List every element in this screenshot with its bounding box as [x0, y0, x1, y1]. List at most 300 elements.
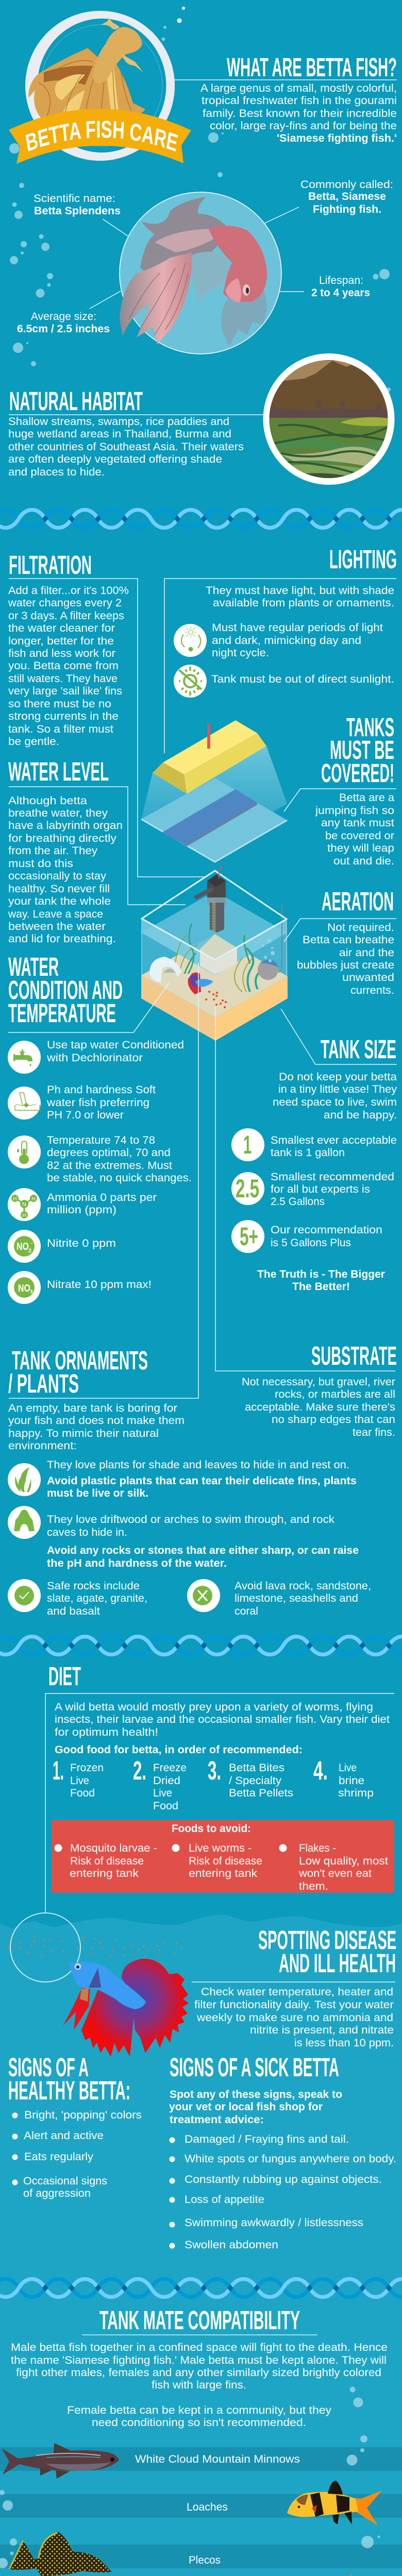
signs of a healthy betta	[8, 2053, 142, 2199]
sunlight text: Tank must be out of direct sunlight.	[211, 673, 394, 685]
flakes: Flakes -	[299, 1842, 336, 1854]
water level text: way. Leave a space	[8, 908, 103, 920]
arches text	[47, 1514, 359, 1569]
fish: corydoras	[305, 2573, 395, 2576]
size 2.5: 2.5	[236, 1174, 259, 1203]
food 2	[133, 1756, 187, 1812]
wave divider 1	[0, 510, 402, 528]
size 5 plus: is 5 Gallons Plus	[271, 1237, 351, 1249]
food 2: Food	[153, 1800, 178, 1812]
exploded aquarium illustration	[141, 720, 288, 1041]
water level text: have a labyrinth organ	[8, 820, 123, 832]
habitat text: Shallow streams, swamps, rice paddies and	[8, 416, 229, 428]
light lamp	[153, 720, 266, 794]
tank size text: Do not keep your betta	[279, 1071, 397, 1083]
diet intro: A wild betta would mostly prey upon a variety of worms, flying	[55, 1701, 373, 1713]
mosquito larvae: entering tank	[70, 1868, 139, 1879]
safe rocks: Safe rocks include	[47, 1580, 140, 1592]
aeration text: bubbles just create	[297, 959, 394, 971]
tanks must be covered	[284, 713, 396, 867]
healthy list: of aggression	[23, 2188, 91, 2199]
description: tropical freshwater fish in the gourami	[202, 95, 397, 107]
average size	[17, 291, 121, 335]
icon: nitrite: -	[31, 1240, 33, 1246]
sick list: Swimming awkwardly / listlessness	[185, 2217, 363, 2229]
food 4	[313, 1756, 374, 1799]
ventral fin	[63, 1987, 90, 2030]
cover text: jumping fish so	[315, 805, 394, 817]
item: temperature: degrees optimal, 70 and	[47, 1147, 171, 1159]
item: tap water	[8, 1039, 184, 1074]
bubbles: lower section	[0, 2386, 382, 2576]
glass lid	[141, 778, 287, 862]
plants in tank	[175, 923, 260, 992]
icon: ammonia molecule: H	[22, 1213, 26, 1218]
substrate text: tear fins.	[353, 1427, 395, 1438]
wave divider 3	[0, 2279, 402, 2297]
habitat text: are often deeply vegetated offering shade	[8, 453, 222, 465]
advice: treatment advice:	[170, 2114, 264, 2126]
size 2.5: Smallest recommended	[271, 1171, 394, 1183]
disease text: filter functionality daily. Test your water	[194, 1999, 394, 2011]
label: loaches: Loaches	[187, 2501, 228, 2513]
flakes	[279, 1842, 388, 1892]
rocks to avoid	[187, 1579, 371, 1617]
plants text	[47, 1459, 357, 1499]
ring	[25, 11, 175, 161]
item: nitrate	[8, 1271, 152, 1304]
food 2: Freeze	[153, 1762, 187, 1774]
size 2.5: 2.5 Gallons	[271, 1196, 325, 1208]
compatibility text	[11, 2342, 388, 2429]
advice: your vet or local fish shop for	[169, 2101, 323, 2113]
icon: nitrate: 3	[30, 1289, 33, 1295]
heading: HEALTHY BETTA:	[8, 2076, 130, 2105]
foods to avoid panel: Foods to avoid:	[172, 1823, 251, 1835]
filter	[195, 868, 226, 933]
food 1	[53, 1756, 104, 1799]
cover text: out and die.	[333, 855, 394, 867]
healthy list: Alert and active	[24, 2130, 104, 2142]
food 2: Dried	[153, 1775, 180, 1787]
water level text: for breathing directly	[8, 833, 117, 844]
item: ammonia	[8, 1188, 157, 1221]
arches text: caves to hide in.	[47, 1527, 127, 1538]
food 4: brine	[339, 1775, 364, 1787]
filtration text: strong currents in the	[8, 710, 119, 722]
disease text: weekly to make sure no ammonia and	[196, 2012, 393, 2024]
water level text: Although betta	[8, 795, 87, 807]
heading	[258, 1925, 396, 1978]
ornaments intro: your fish and does not make them	[8, 1415, 185, 1427]
tank size text	[273, 1071, 397, 1121]
tank mate compatibility	[11, 2306, 388, 2429]
substrate text: rocks, or marbles are all	[275, 1388, 395, 1400]
water surface	[141, 891, 287, 975]
disease text: is less than 10 ppm.	[294, 2037, 394, 2049]
habitat text: other countries of Southeast Asia. Their waters	[8, 441, 244, 453]
item: nitrate: Nitrate 10 ppm max!	[47, 1279, 152, 1291]
food 4: 4.	[313, 1756, 328, 1785]
water level text	[8, 795, 123, 945]
cover text: any tank must	[321, 817, 394, 829]
icon: ammonia molecule: H	[31, 1196, 36, 1202]
filtration text: longer, better for the	[8, 635, 114, 647]
label: plecos: Plecos	[189, 2554, 221, 2566]
rock and bubbles	[258, 904, 282, 980]
description: color, large ray-fins and for being the	[210, 120, 397, 132]
water level text: breathe water, they	[8, 807, 108, 819]
heading	[8, 952, 123, 1028]
icon: nitrate: NO	[18, 1283, 30, 1294]
heading: TANK ORNAMENTS	[12, 1346, 148, 1375]
icon: nitrite: NO	[16, 1241, 29, 1252]
substrate text: Not necessary, but gravel, river	[242, 1376, 395, 1388]
hero emblem: ring, gold betta and banner	[9, 11, 191, 164]
lighting intro: available from plants or ornaments.	[213, 597, 394, 609]
average size: 6.5cm / 2.5 inches	[17, 323, 110, 335]
lighter water area with wavy surface	[0, 1914, 402, 2576]
item: temperature: 82 at the extremes. Must	[47, 1160, 172, 1172]
tank mate rows	[0, 2447, 402, 2576]
magnifier ring	[10, 1913, 80, 1982]
mosquito larvae	[55, 1842, 157, 1879]
food 3: 3.	[208, 1756, 221, 1785]
icon: thermometer	[8, 1136, 41, 1168]
water level text: must do this	[8, 858, 73, 870]
live worms: Live worms -	[189, 1842, 252, 1854]
food 2: 2.	[133, 1756, 146, 1785]
anal fin	[81, 1990, 135, 2057]
wave divider 2	[0, 1637, 402, 1654]
item: temperature: be stable, no quick changes.	[47, 1172, 192, 1184]
heading	[8, 2053, 130, 2105]
tail fin	[122, 1959, 189, 2053]
foods to avoid panel	[52, 1820, 394, 1893]
tank base	[141, 975, 215, 1041]
feeding blue betta illustration	[9, 1913, 189, 2057]
item: ph: PH 7.0 or lower	[47, 1109, 124, 1121]
bubbles: upper section	[9, 7, 391, 392]
advice: Spot any of these signs, speak to	[170, 2089, 342, 2100]
heading: SIGNS OF A	[8, 2053, 89, 2082]
icon: ammonia molecule	[8, 1188, 41, 1221]
sick list	[169, 2133, 396, 2251]
filtration text: still waters. They have	[8, 673, 118, 685]
arch ornament	[149, 957, 181, 982]
heading: / PLANTS	[8, 1369, 79, 1398]
ornaments intro: happy. To mimic their natural	[8, 1428, 159, 1439]
commonly called: Betta, Siamese	[308, 191, 386, 202]
substrate text: acceptable. Make sure there's	[245, 1401, 395, 1413]
bubble circle	[120, 192, 281, 354]
the truth: The Better!	[292, 1281, 350, 1293]
the truth: The Truth is - The Bigger	[257, 1268, 385, 1280]
tank size text: and be happy.	[324, 1109, 397, 1121]
food 3: Betta Pellets	[229, 1787, 293, 1799]
food 4: shrimp	[338, 1787, 374, 1799]
aeration text	[297, 922, 394, 996]
water level text: your tank the whole	[8, 895, 111, 907]
aeration text: Not required.	[327, 922, 394, 934]
habitat text: huge wetland areas in Thailand, Burma and	[8, 428, 231, 440]
signs of a sick betta	[169, 2053, 396, 2251]
cycle text: and dark, mimicking day and	[212, 635, 361, 647]
compatibility text: fight other males, females and any other similarly sized brightly colored	[16, 2367, 381, 2379]
water level text: healthy. So never fill	[8, 883, 110, 895]
compatibility text: fish with large fins.	[152, 2379, 246, 2391]
food 1: Live	[70, 1775, 89, 1787]
healthy list	[12, 2109, 142, 2199]
aeration text: unwanted	[342, 972, 394, 984]
compatibility text: Male betta fish together in a confined space will fight to the death. Hence	[11, 2342, 388, 2353]
compatibility text: the name 'Siamese fighting fish.' Male betta must be kept alone. They will	[11, 2354, 387, 2366]
water level	[8, 757, 186, 945]
safe rocks: and basalt	[47, 1605, 100, 1617]
tank size	[231, 1009, 397, 1293]
disease text	[194, 1986, 394, 2049]
habitat landscape	[263, 353, 395, 485]
cycle text: Must have regular periods of light	[212, 622, 383, 634]
cycle text: night cycle.	[212, 647, 269, 659]
description: A large genus of small, mostly colorful,	[200, 82, 397, 94]
sick list: Swollen abdomen	[185, 2239, 278, 2251]
gold betta	[28, 17, 145, 121]
flakes: them.	[299, 1880, 328, 1892]
aeration text: currents.	[350, 985, 394, 996]
safe rocks: slate, agate, granite,	[47, 1592, 147, 1604]
item: tap water: with Dechlorinator	[46, 1052, 143, 1064]
food 4: Live	[339, 1762, 357, 1774]
filtration text: you. Betta come from	[8, 660, 119, 672]
size 2.5	[231, 1171, 394, 1208]
heading: FILTRATION	[9, 550, 92, 580]
arches text: Avoid any rocks or stones that are either sharp, or can raise	[47, 1545, 359, 1556]
rear block	[200, 934, 237, 961]
filtration text: Add a filter...or it's 100%	[8, 585, 129, 597]
tank size text: in a tiny little vase! They	[278, 1083, 397, 1095]
lifespan	[280, 275, 370, 299]
light beam	[141, 746, 287, 845]
aeration text: air and the	[339, 947, 394, 959]
heading: DIET	[48, 1662, 81, 1691]
average size: Average size:	[31, 311, 96, 323]
compatibility text: need conditioning so isn't recommended.	[92, 2417, 306, 2429]
food specks	[9, 1936, 181, 1957]
water level text: between the water	[8, 921, 106, 933]
disease text: nitrite is present, and nitrate	[250, 2024, 394, 2036]
cover text: be covered or	[325, 830, 394, 842]
heading	[8, 1346, 148, 1398]
diet intro: Good food for betta, in order of recommended:	[55, 1744, 303, 1756]
item: nitrite: Nitrite 0 ppm	[47, 1238, 116, 1249]
what are betta fish	[166, 53, 397, 144]
aeration	[284, 887, 396, 996]
description: 'Siamese fighting fish.'	[277, 132, 397, 144]
icon: arch	[8, 1506, 41, 1539]
ornaments intro	[8, 1402, 185, 1452]
mosquito larvae: Mosquito larvae -	[70, 1842, 157, 1854]
size 1: tank is 1 gallon	[271, 1147, 345, 1159]
food 3	[208, 1756, 293, 1799]
the truth	[257, 1268, 385, 1293]
diet	[45, 1662, 394, 1913]
icon: test strip	[8, 1087, 41, 1120]
icon: ammonia molecule: H	[13, 1196, 17, 1202]
ornaments intro: An empty, bare tank is boring for	[8, 1402, 177, 1414]
water condition and temperature	[8, 952, 192, 1304]
sick list: Damaged / Fraying fins and tail.	[185, 2133, 349, 2145]
food 3: / Specialty	[229, 1775, 282, 1787]
diet intro: insects, their larvae and the occasional smaller fish. Vary their diet	[55, 1714, 390, 1725]
natural habitat	[8, 353, 395, 485]
tank rim	[142, 871, 287, 960]
icon: nitrate	[8, 1271, 41, 1304]
tank size text: need space to live, swim	[273, 1096, 397, 1108]
pectoral fin	[89, 1968, 101, 1988]
lifespan: 2 to 4 years	[311, 287, 370, 299]
habitat text: and places to hide.	[8, 466, 105, 478]
plants text: must be live or silk.	[47, 1487, 148, 1499]
item: temperature: Temperature 74 to 78	[47, 1134, 155, 1146]
filtration text: tank. So a filter must	[8, 723, 113, 735]
live worms: Risk of disease	[189, 1855, 262, 1867]
size 1: 1	[243, 1130, 252, 1159]
betta in tank	[188, 973, 213, 994]
size 5 plus	[231, 1220, 382, 1253]
eye	[74, 1963, 81, 1970]
sick list: Loss of appetite	[185, 2194, 264, 2206]
lighting intro: They must have light, but with shade	[206, 585, 394, 597]
spotting disease	[192, 1925, 396, 2049]
commonly called: Commonly called:	[300, 179, 393, 191]
heading: NATURAL HABITAT	[9, 386, 143, 416]
item: ammonia: Ammonia 0 parts per	[47, 1192, 157, 1204]
substrate text: no sharp edges that can	[272, 1414, 395, 1426]
live worms	[172, 1842, 262, 1879]
pink betta illustration	[120, 197, 267, 347]
substrate text	[242, 1376, 395, 1438]
description: family. Best known for their incredible	[203, 108, 397, 120]
scientific name: Scientific name:	[34, 193, 115, 205]
arches text: the pH and hardness of the water.	[47, 1557, 227, 1569]
food 1: Food	[70, 1787, 95, 1799]
size 1: Smallest ever acceptable	[271, 1134, 397, 1146]
item: ph: Ph and hardness Soft	[47, 1084, 156, 1096]
lighting intro	[206, 585, 394, 609]
cover text: Betta are a	[339, 792, 394, 804]
cover text	[315, 792, 394, 867]
mosquito larvae: Risk of disease	[70, 1855, 144, 1867]
description	[200, 82, 397, 144]
heading	[321, 713, 394, 788]
scientific name	[34, 193, 128, 236]
filtration text	[8, 585, 129, 748]
banner	[9, 109, 191, 164]
diet intro	[55, 1701, 390, 1756]
icon: ammonia molecule: N	[22, 1201, 26, 1208]
water level text: and lid for breathing.	[8, 933, 116, 945]
cycle text	[212, 622, 383, 659]
size 5 plus: 5+	[240, 1222, 258, 1251]
water level text: from the air. They	[8, 845, 98, 857]
food 2: Live	[153, 1787, 172, 1799]
filtration text: so there must be no	[8, 698, 111, 710]
safe rocks	[8, 1579, 147, 1617]
scientific name: Betta Splendens	[34, 205, 121, 217]
filtration text: water changes every 2	[8, 597, 122, 609]
label: minnows: White Cloud Mountain Minnows	[135, 2453, 300, 2465]
body	[69, 1962, 146, 2009]
item: tap water: Use tap water Conditioned	[47, 1039, 184, 1051]
item: ph	[8, 1084, 156, 1121]
filtration text: the water cleaner for	[8, 622, 115, 634]
item: ammonia: million (ppm)	[47, 1204, 116, 1216]
banner title: BETTA FISH CARE	[26, 121, 178, 151]
compatibility text: Female betta can be kept in a community, but they	[67, 2404, 332, 2416]
item: nitrite	[8, 1230, 116, 1263]
filtration text: or 3 days. A filter keeps	[8, 610, 124, 622]
facts around pink betta	[17, 179, 393, 354]
size 5 plus: Our recommendation	[271, 1224, 382, 1236]
plants text: Avoid plastic plants that can tear their delicate fins, plants	[47, 1475, 357, 1487]
flakes: Low quality, most	[299, 1855, 388, 1867]
disease text: Check water temperature, heater and	[201, 1986, 393, 1998]
icon: plant	[8, 1463, 41, 1496]
arches text: They love driftwood or arches to swim through, and rock	[47, 1514, 335, 1526]
food dots	[206, 992, 226, 1007]
heading: WATER	[8, 952, 59, 981]
cover text: they will leap	[327, 842, 394, 854]
substrate	[215, 1006, 397, 1438]
healthy list: Bright, 'popping' colors	[24, 2109, 142, 2121]
aeration text: Betta can breathe	[303, 934, 394, 946]
filtration	[8, 550, 204, 877]
sick list: White spots or fungus anywhere on body.	[185, 2153, 396, 2165]
item: ph: water fish preferring	[46, 1097, 149, 1109]
tank ornaments and plants	[8, 963, 371, 1617]
water level text: occasionally to stay	[8, 870, 107, 882]
icon: no direct sunlight	[174, 665, 207, 698]
icon: tap	[8, 1041, 41, 1074]
food 3: Betta Bites	[229, 1762, 284, 1774]
heading: WATER LEVEL	[8, 757, 109, 786]
sick list: Constantly rubbing up against objects.	[185, 2174, 382, 2185]
filtration text: very large 'sail like' fins	[8, 685, 122, 697]
lighting	[164, 545, 397, 753]
fish: pleco	[9, 2532, 112, 2576]
size 1	[231, 1128, 397, 1161]
rocks to avoid: coral	[234, 1605, 258, 1617]
ornaments intro: environment:	[8, 1440, 77, 1452]
diet intro: for optimum health!	[55, 1726, 158, 1738]
filtration text: fish and less work for	[8, 648, 115, 659]
commonly called	[265, 179, 393, 223]
rocks to avoid: limestone, seashells and	[234, 1592, 358, 1604]
icon: nitrite: 2	[28, 1248, 31, 1254]
item: temperature	[8, 1134, 192, 1184]
icon: nitrite	[8, 1230, 41, 1263]
plants text: They love plants for shade and leaves to hide in and rest on.	[47, 1459, 349, 1471]
healthy list: Occasional signs	[23, 2175, 107, 2187]
healthy list: Eats regularly	[24, 2151, 94, 2163]
heading: TEMPERATURE	[8, 998, 116, 1028]
rocks to avoid: Avoid lava rock, sandstone,	[234, 1580, 371, 1592]
filtration text: be gentle.	[8, 736, 59, 748]
habitat text	[8, 416, 244, 478]
food 1: Frozen	[70, 1762, 104, 1774]
icon: day night cycle	[174, 624, 207, 657]
